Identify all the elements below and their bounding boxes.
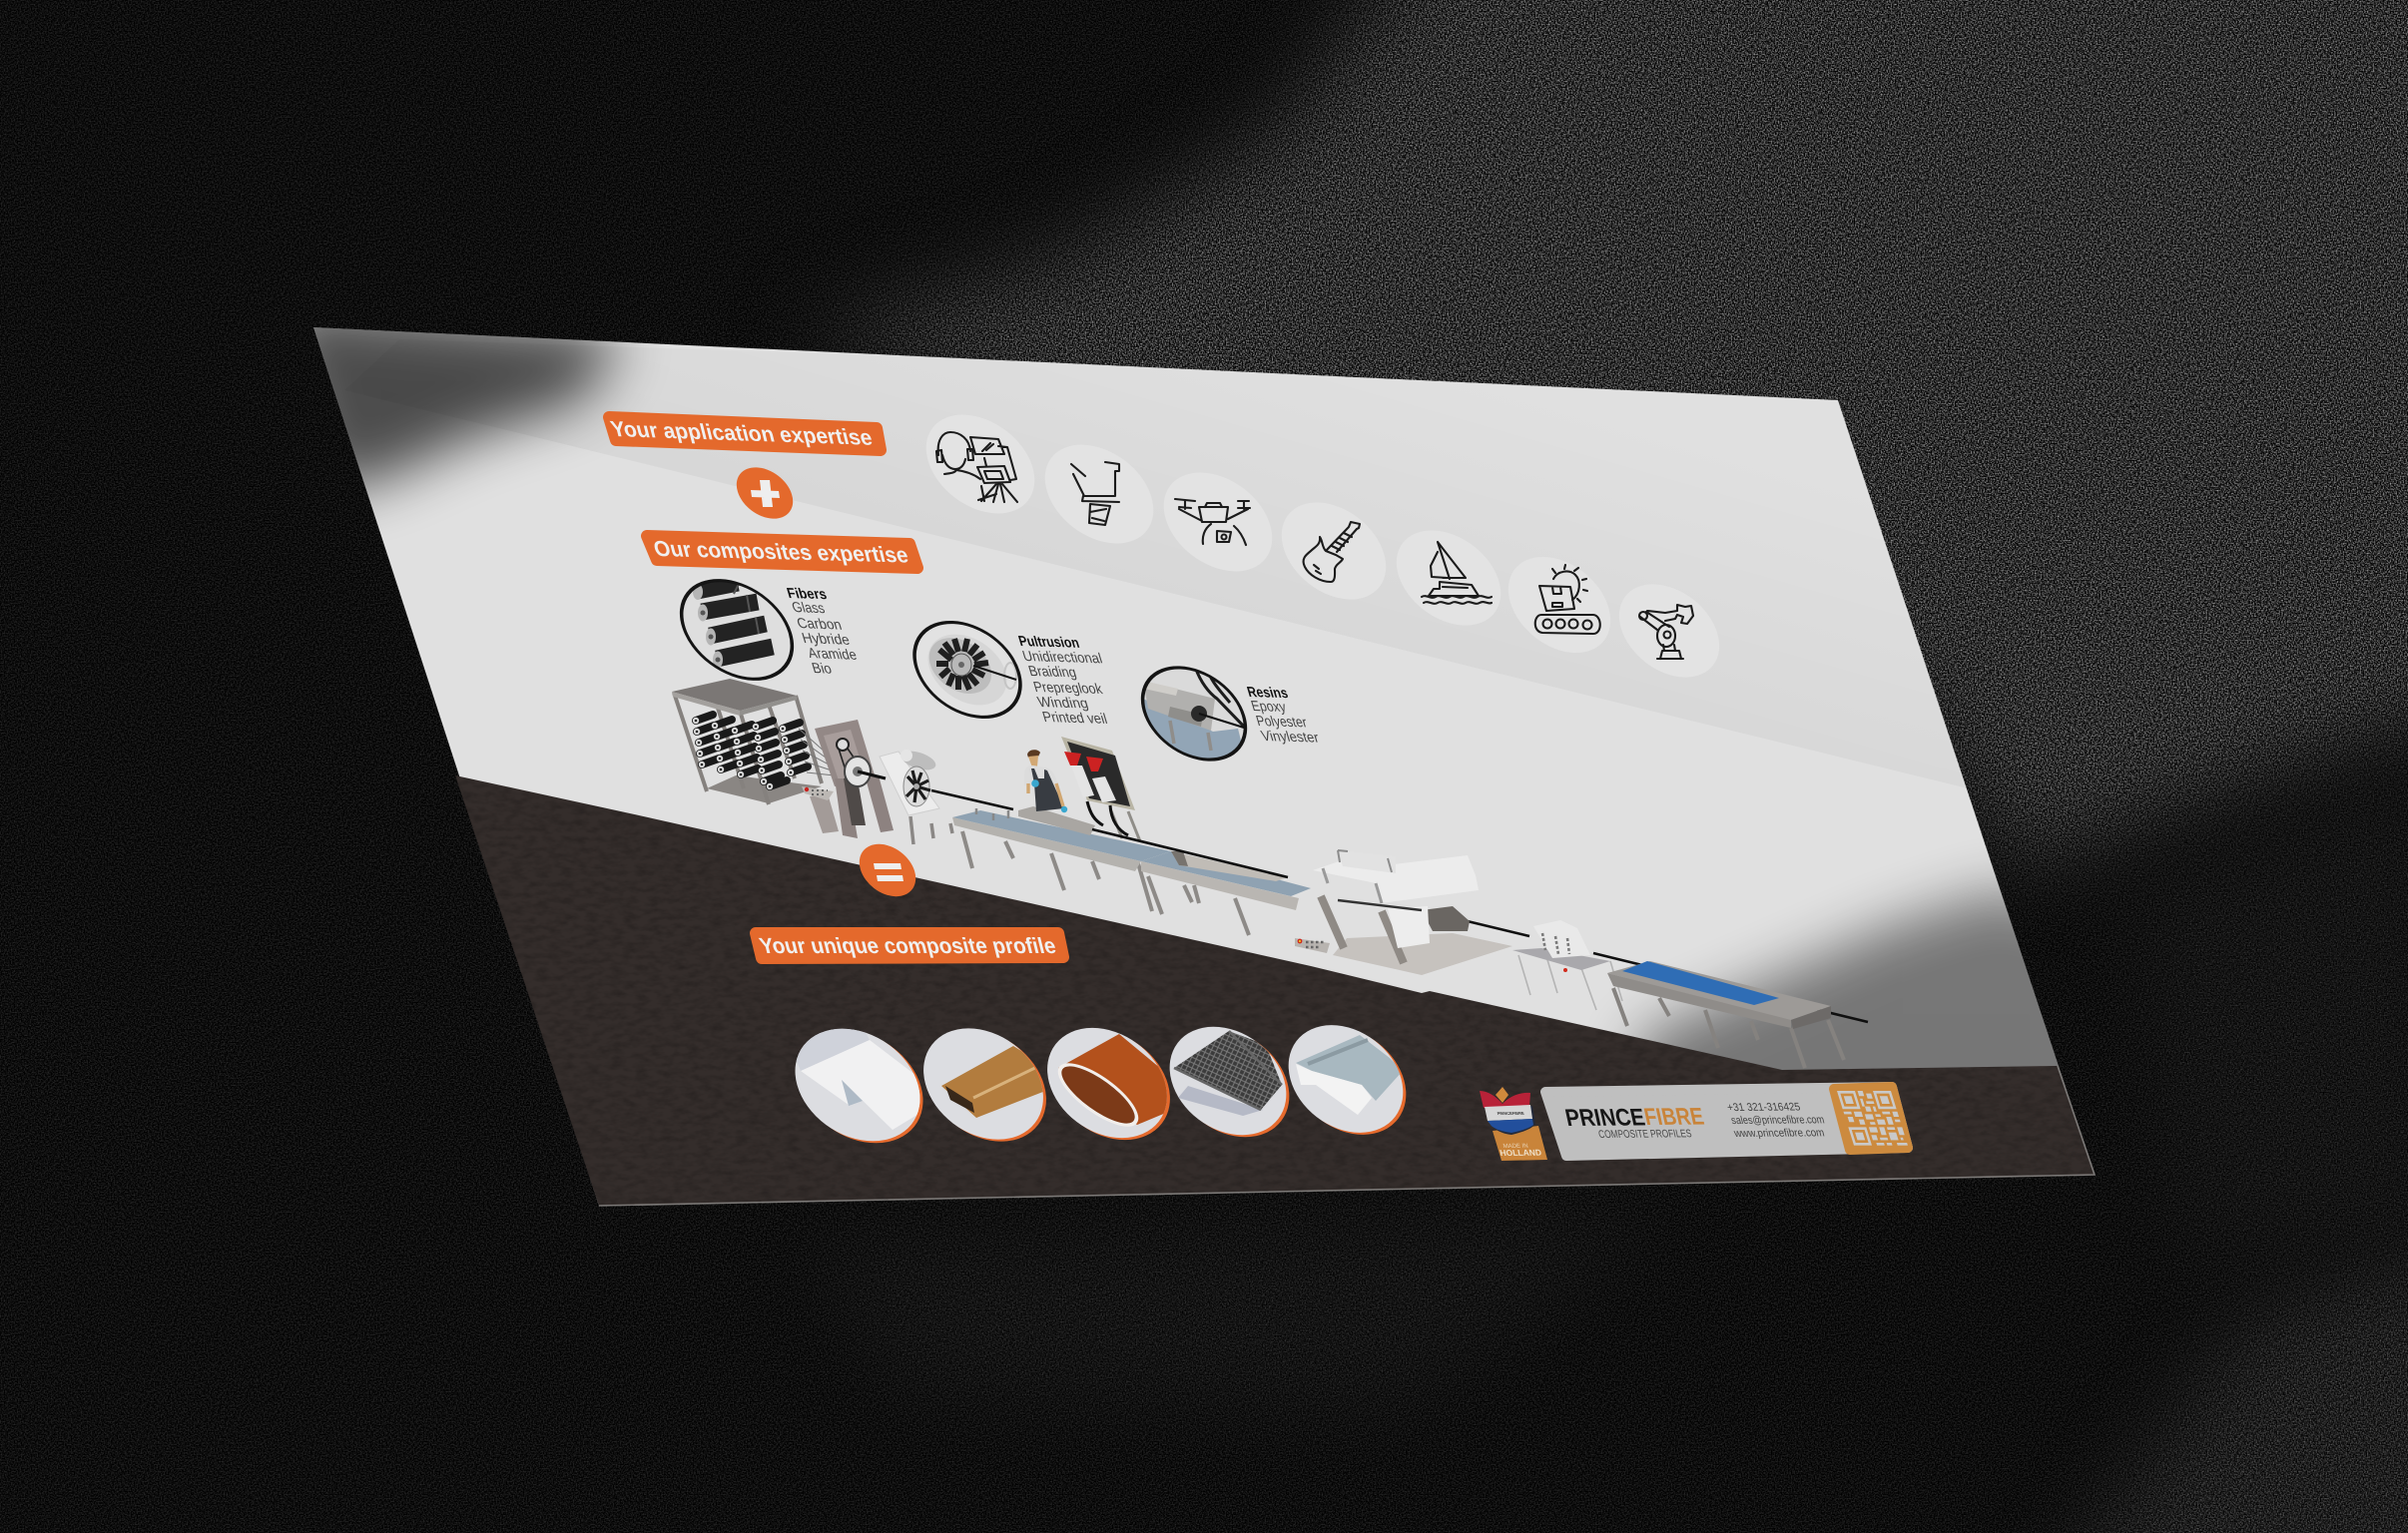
text block: resins list: Vinylester [1259,729,1321,747]
text block: resins list: Resins [1245,685,1290,702]
plus symbol [730,466,800,520]
worker figure [1024,750,1067,812]
text block: fibers list [785,586,859,678]
text block: pultrusion list [1016,634,1109,728]
text block: fibers list: Hybride [800,631,852,649]
machine: guide plate and tensioner [802,720,894,838]
text block: pultrusion list: Pultrusion [1016,634,1081,652]
icon circle 1: film camera operator [912,413,1048,515]
badge: made in holland: MADE IN [1503,1144,1528,1150]
contact panel [1545,1087,1908,1156]
text block: pultrusion list: Printed veil [1040,710,1109,728]
profile photo 4: carbon braid [1170,1026,1290,1138]
machine: cutter [1512,920,1622,1010]
process circle: pultrusion [912,621,1022,719]
heading: your application expertise: Your application expertise [608,416,875,450]
text block: fibers list: Glass [790,600,827,617]
machine: die plate [880,748,952,844]
text block: fibers list: Fibers [785,586,829,603]
profile photo 3: orange oval tube [1047,1028,1170,1140]
icon circle 3: drone [1150,471,1286,573]
icon circle 2: seat [1031,443,1167,545]
text block: fibers list: Carbon [795,616,844,634]
logo: FIBRE [1641,1104,1706,1131]
symbol: equals [853,843,922,897]
QR code [1834,1087,1908,1150]
heading: your unique composite profile: Your unique composite profile [757,933,1058,958]
soft shadows on card [313,327,2065,1206]
control box [802,786,834,800]
text block: resins list: Polyester [1254,714,1309,731]
icon circle 7: robot arm [1607,583,1731,679]
profile photo 1: white angle [795,1028,922,1144]
icon circle 5: sailing boat [1384,529,1513,627]
control box [1295,938,1330,953]
contact details: sales@princefibre.com [1730,1114,1826,1127]
logo [1562,1104,1706,1141]
machine: pulling station [1295,850,1512,975]
machine: electrical panel [1061,737,1140,841]
badge: made in holland [1480,1087,1547,1161]
diagonal shaded band behind icons [527,417,1440,659]
process circle: resins [1140,666,1248,762]
badge: made in holland: HOLLAND [1499,1148,1542,1158]
machine: table one [952,806,1311,935]
machine: bobbin rack [672,679,844,804]
machine: conveyor table [1607,961,1844,1068]
icon circle 4: electric guitar [1269,501,1399,601]
text block: pultrusion list: Prepreglook [1031,680,1105,698]
dark lower section of card [455,775,2095,1206]
logo: COMPOSITE PROFILES [1597,1128,1693,1141]
text block: resins list: Epoxy [1249,699,1289,716]
profile photo 2: wood tube [923,1028,1046,1142]
panel: printed card [313,327,2096,1207]
contact details: +31 321-316425 [1726,1102,1802,1114]
heading: our composites expertise: Our composites expertise [651,536,910,568]
badge: made in holland: PRINCEFIBRE [1497,1111,1524,1116]
product line [931,790,1868,1022]
text block: resins list [1245,685,1321,747]
profile photo 5: stone-look profile [1288,1025,1406,1135]
text block: pultrusion list: Unidirectional [1020,649,1104,667]
contact details: www.princefibre.com [1732,1127,1826,1140]
contact details [1726,1102,1826,1140]
icon circle 6: conveyor with gear [1496,555,1623,655]
logo: PRINCE [1562,1105,1647,1132]
process circle: fibers [679,579,795,681]
text block: pultrusion list: Winding [1035,695,1090,712]
text block: fibers list: Bio [810,661,834,678]
text block: fibers list: Aramide [806,646,859,664]
red valves [1064,752,1103,771]
text block: pultrusion list: Braiding [1026,664,1078,681]
